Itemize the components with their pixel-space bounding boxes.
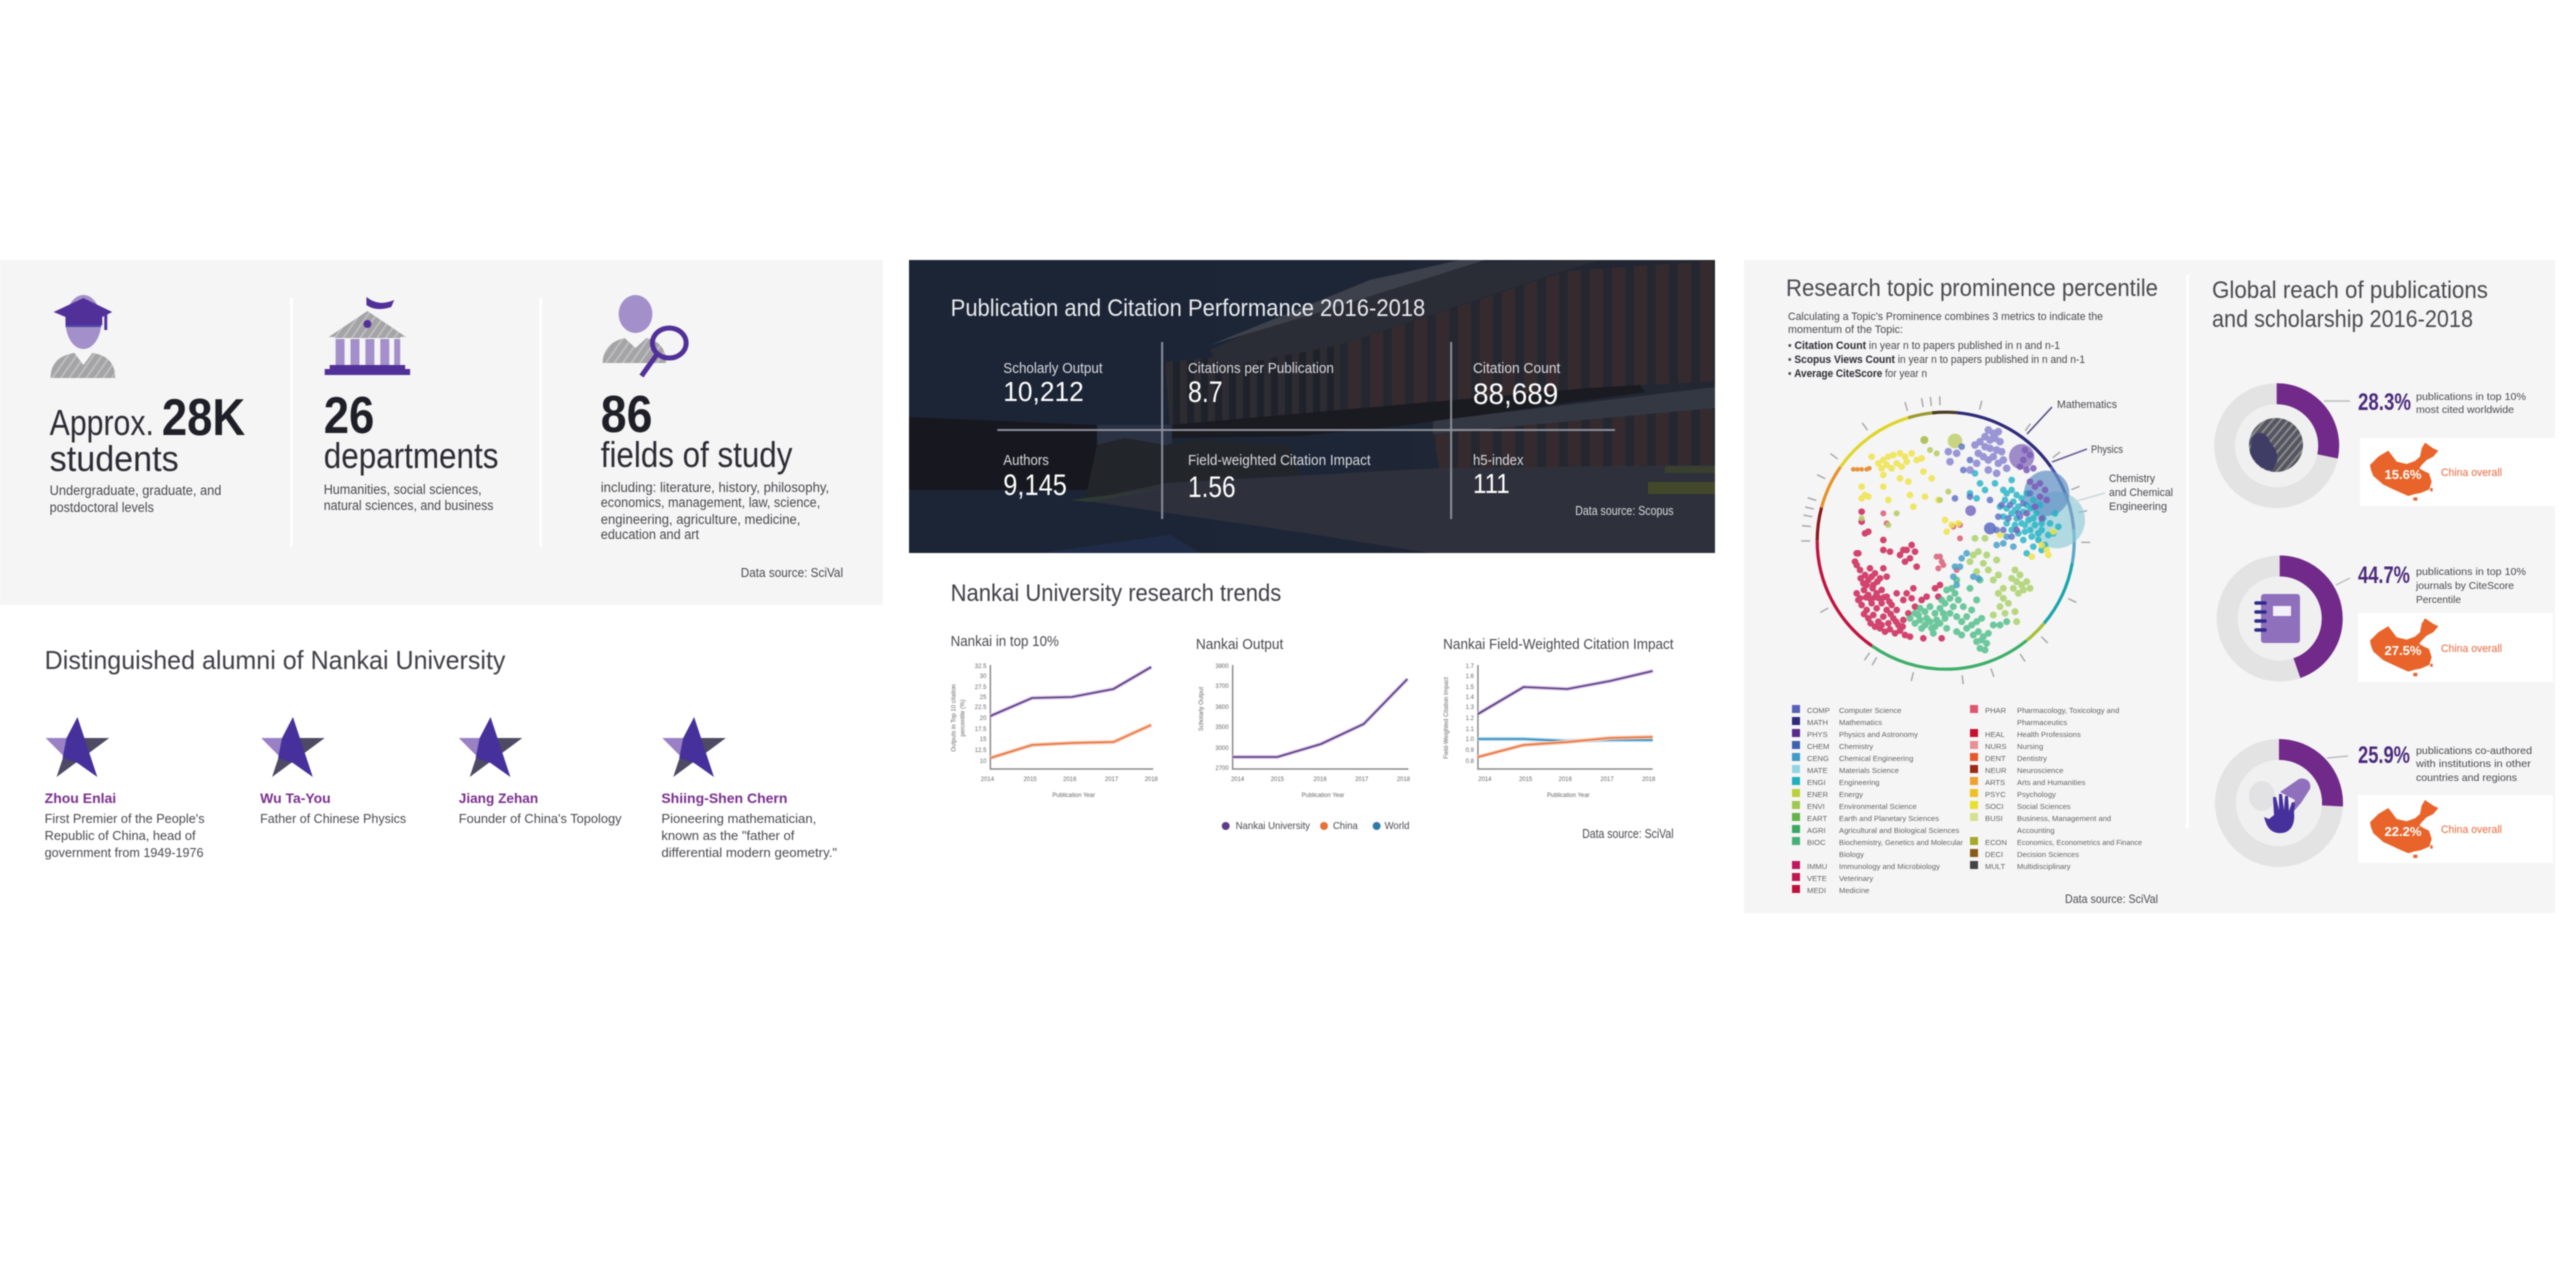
legend: subject areas, right column: Nursing (2017, 742, 2043, 751)
panel: publication and citation performance (909, 260, 1715, 553)
chart legend: Nankai University (1236, 821, 1310, 832)
stat: 25.9% (2358, 742, 2532, 784)
alumnus: Shiing-Shen Chern: Shiing-Shen Chern (661, 790, 787, 806)
line chart: Nankai in top 10%: 10 (980, 759, 987, 765)
icon: notebook (2256, 594, 2300, 643)
data source: Data source: SciVal (2065, 892, 2158, 906)
heading: research trends: Nankai University research trends (951, 580, 1281, 607)
legend: subject areas, right column: MULT (1985, 862, 2005, 871)
metric: h5-index: h5-index (1473, 452, 1524, 469)
heading: global reach (2212, 277, 2488, 333)
legend: subject areas, left column: Chemistry (1839, 742, 1873, 751)
stat: 44.7%: journals by CiteScore (2415, 580, 2514, 592)
data source: Data source: SciVal (741, 565, 843, 580)
chart: topic prominence wheel (1806, 399, 2173, 681)
data source: Data source: SciVal (1582, 826, 1674, 841)
stat: 28.3% (2358, 389, 2526, 416)
legend: subject areas, left column: CHEM (1807, 742, 1829, 751)
chart legend: China (1333, 821, 1358, 832)
callout: China overall 15.6%: China overall (2441, 467, 2502, 479)
metric: citation count (1473, 360, 1561, 411)
data source: Data source: Scopus (1575, 503, 1674, 518)
line chart: Nankai output: Scholarly Output (1199, 687, 1205, 731)
stat: 25.9%: countries and regions (2416, 772, 2517, 784)
legend: subject areas, left column: Medicine (1839, 886, 1869, 895)
line chart: Nankai output: 3500 (1215, 725, 1229, 731)
stat: 44.7% (2358, 562, 2526, 606)
legend: subject areas, right column: Business, Management and (2017, 814, 2111, 823)
heading: global reach: Global reach of publications (2212, 277, 2488, 304)
callout: China overall 15.6% (2360, 438, 2555, 506)
stat: students: Undergraduate, graduate, and (50, 482, 221, 498)
legend: subject areas, right column: Psychology (2017, 790, 2056, 799)
line chart: Nankai in top 10%: 30 (980, 674, 987, 680)
legend: subject areas, left column: MATE (1807, 766, 1828, 775)
line chart: Nankai field-weighted citation impact: 1.7 (1466, 664, 1475, 670)
donut: international collaboration 25.9% (2226, 750, 2348, 856)
line chart: Nankai field-weighted citation impact (1443, 636, 1674, 799)
stat: fields of study: education and art (601, 526, 699, 542)
callout: Physics: Physics (2091, 444, 2123, 456)
legend: subject areas, left column: Veterinary (1839, 874, 1873, 883)
line chart: Nankai field-weighted citation impact: 1.3 (1466, 705, 1475, 711)
metric: scholarly output (1003, 360, 1103, 407)
alumnus: Zhou Enlai (45, 717, 205, 860)
legend: subject areas, right column: NEUR (1985, 766, 2007, 775)
line chart: Nankai output: 2014 (1231, 777, 1245, 783)
legend: subject areas, left column: PHYS (1807, 730, 1828, 739)
legend: subject areas, right column: HEAL (1985, 730, 2005, 739)
stat: 44.7%: Percentile (2416, 594, 2461, 606)
alumnus: Zhou Enlai: Republic of China, head of (45, 828, 196, 843)
line chart: Nankai output: 3600 (1215, 705, 1229, 711)
callout: China overall 22.2%: 22.2% (2384, 824, 2422, 839)
metric: citations per publication: 8.7 (1188, 376, 1223, 409)
heading: publication performance: Publication and Citation Performance 2016-2018 (951, 295, 1425, 322)
line chart: Nankai in top 10%: percentile (%) (961, 700, 967, 736)
legend: subject areas, right column: Economics, Econometrics and Finance (2017, 838, 2142, 847)
line chart: Nankai output: 3700 (1215, 684, 1229, 690)
chart legend (1222, 821, 1409, 832)
legend: subject areas, left column: Engineering (1839, 778, 1880, 787)
prominence description: • Citation Count in year n to papers published in n and n-1 (1788, 340, 2060, 352)
alumnus: Shiing-Shen Chern (661, 717, 838, 860)
line chart: Nankai field-weighted citation impact: 2014 (1478, 777, 1492, 783)
legend: subject areas, left column: MATH (1807, 718, 1828, 727)
legend: subject areas, left column: ENER (1807, 790, 1829, 799)
stat: 44.7%: publications in top 10% (2416, 566, 2526, 578)
icon: graduate student (51, 295, 115, 378)
donut: top journals 44.7% (2227, 566, 2350, 671)
legend: subject areas, right column: Decision Sciences (2017, 850, 2079, 859)
line chart: Nankai field-weighted citation impact: 1.0 (1466, 737, 1475, 743)
legend: subject areas, right column: NURS (1985, 742, 2007, 751)
line chart: Nankai output: 2017 (1355, 777, 1369, 783)
alumnus: Zhou Enlai: government from 1949-1976 (45, 845, 204, 860)
icon: handshake (2249, 779, 2310, 833)
stat: departments: natural sciences, and business (324, 497, 494, 513)
panel: global reach of publications (2212, 277, 2555, 863)
metric: h5-index (1473, 452, 1524, 499)
legend: subject areas, right column: DENT (1985, 754, 2006, 763)
legend: subject areas, left column: Biology (1839, 850, 1864, 859)
icon: globe (2249, 418, 2303, 472)
metric: citations per publication (1188, 360, 1334, 409)
stat: fields of study: including: literature, history, philosophy, (601, 479, 829, 495)
stat: students (50, 388, 245, 515)
line chart: Nankai in top 10%: 27.5 (975, 685, 987, 691)
legend: subject areas, left column: Chemical Engineering (1839, 754, 1913, 763)
legend: subject areas, right column: Social Sciences (2017, 802, 2071, 811)
callout: China overall 27.5% (2358, 613, 2553, 682)
legend: subject areas, right column: Accounting (2017, 826, 2055, 835)
stat: fields of study (601, 385, 829, 542)
legend: subject areas, left column: Energy (1839, 790, 1863, 799)
chart legend: World (1385, 821, 1409, 832)
legend: subject areas, left column: Physics and Astronomy (1839, 730, 1918, 739)
line chart: Nankai in top 10%: 22.5 (975, 705, 987, 711)
line chart: Nankai in top 10%: Publication Year (1052, 793, 1095, 799)
metric: citation count: Citation Count (1473, 360, 1561, 377)
legend: subject areas, right column: ARTS (1985, 778, 2005, 787)
callout: China overall 22.2% (2358, 795, 2553, 863)
legend: subject areas, left column: ENVI (1807, 802, 1825, 811)
callout: China overall 27.5%: China overall (2441, 643, 2502, 655)
panel: university key figures (0, 260, 883, 605)
metric: authors (1003, 452, 1067, 502)
legend: subject areas, left column: MEDI (1807, 886, 1826, 895)
legend: subject areas, right column: Pharmacology, Toxicology and (2017, 706, 2119, 715)
legend: subject areas, left column: CENG (1807, 754, 1829, 763)
legend: subject areas, left column: Materials Science (1839, 766, 1899, 775)
line chart: Nankai in top 10%: 17.5 (975, 727, 987, 733)
line chart: Nankai in top 10%: 32.5 (975, 664, 987, 670)
callout: Physics (2052, 444, 2123, 462)
callout: Mathematics (2027, 399, 2117, 434)
line chart: Nankai in top 10%: Nankai in top 10% (951, 633, 1059, 650)
legend: subject areas, left column: ENGI (1807, 778, 1826, 787)
line chart: Nankai field-weighted citation impact: 1.6 (1466, 674, 1475, 680)
legend: subject areas, right column: DECI (1985, 850, 2003, 859)
callout: China overall 22.2%: China overall (2441, 824, 2502, 836)
heading: global reach: and scholarship 2016-2018 (2212, 306, 2473, 333)
panel: research topic prominence (1786, 275, 2555, 906)
stat: 25.9%: with institutions in other (2415, 758, 2532, 770)
alumnus: Shiing-Shen Chern: Pioneering mathematician, (661, 811, 816, 826)
metric: scholarly output: Scholarly Output (1003, 360, 1103, 377)
alumnus: Shiing-Shen Chern: known as the "father of (661, 828, 795, 843)
legend: subject areas, left column: AGRI (1807, 826, 1826, 835)
legend: subject areas, right column: ECON (1985, 838, 2007, 847)
line chart: Nankai in top 10%: 2015 (1023, 777, 1037, 783)
callout: China overall 27.5%: 27.5% (2384, 643, 2422, 658)
line chart: Nankai field-weighted citation impact: Field-Weighted Citation Impact (1444, 677, 1450, 759)
panel: research trends (951, 580, 1674, 841)
heading: research topic prominence percentile: Research topic prominence percentile (1786, 275, 2158, 302)
stat: 25.9%: publications co-authored (2416, 745, 2532, 757)
stat: fields of study: engineering, agriculture, medicine, (601, 511, 800, 527)
icon: university building (325, 297, 410, 375)
legend: subject areas, left column: BIOC (1807, 838, 1826, 847)
legend: subject areas, left column: IMMU (1807, 862, 1827, 871)
line chart: Nankai output: 2018 (1397, 777, 1411, 783)
alumnus: Wu Ta-You (260, 717, 406, 826)
line chart: Nankai output: Nankai Output (1196, 636, 1284, 653)
line chart: Nankai in top 10%: 2014 (981, 777, 995, 783)
prominence description: momentum of the Topic: (1788, 324, 1903, 336)
legend: subject areas, right column: Neuroscience (2017, 766, 2063, 775)
legend: subject areas, right column: Pharmaceutics (2017, 718, 2067, 727)
stat: fields of study: fields of study (601, 435, 792, 475)
line chart: Nankai in top 10%: 2017 (1105, 777, 1119, 783)
stat: departments (324, 386, 498, 513)
stat: students: postdoctoral levels (50, 499, 154, 515)
line chart: Nankai in top 10%: 15 (980, 737, 987, 743)
alumnus: Wu Ta-You: Wu Ta-You (260, 790, 331, 806)
line chart: Nankai field-weighted citation impact: 1.2 (1466, 716, 1475, 722)
metric: field-weighted citation impact (1188, 452, 1371, 504)
heading: alumni: Distinguished alumni of Nankai University (45, 647, 505, 675)
prominence description: • Average CiteScore for year n (1788, 368, 1927, 380)
stat: 44.7%: 44.7% (2358, 562, 2410, 589)
line chart: Nankai field-weighted citation impact: 1.4 (1466, 695, 1475, 701)
stat: students: 28K (162, 388, 245, 446)
callout: Chemistry and Chemical Engineering: Chemistry (2109, 473, 2155, 485)
line chart: Nankai output: 3000 (1215, 746, 1229, 752)
legend: subject areas, right column: Dentistry (2017, 754, 2047, 763)
line chart: Nankai field-weighted citation impact: 0.9 (1466, 748, 1475, 754)
line chart: Nankai output: Publication Year (1302, 793, 1344, 799)
stat: fields of study: 86 (601, 385, 652, 443)
legend: subject areas, right column: Arts and Humanities (2017, 778, 2086, 787)
alumnus: Jiang Zehan: Jiang Zehan (459, 790, 538, 806)
legend: subject areas, left column: Earth and Planetary Sciences (1839, 814, 1939, 823)
line chart: Nankai in top 10%: 25 (980, 695, 987, 701)
metric: h5-index: 111 (1473, 468, 1510, 499)
callout: Chemistry and Chemical Engineering (2073, 473, 2173, 513)
line chart: Nankai in top 10%: 20 (980, 716, 987, 722)
stat: departments: 26 (324, 386, 374, 444)
line chart: Nankai field-weighted citation impact: Nankai Field-Weighted Citation Impact (1443, 636, 1674, 653)
callout: Chemistry and Chemical Engineering: Engineering (2109, 501, 2167, 513)
line chart: Nankai output: 2016 (1313, 777, 1327, 783)
donut: top cited publications 28.3% (2225, 394, 2350, 498)
stat: fields of study: economics, management, law, science, (601, 494, 820, 510)
line chart: Nankai output: 2015 (1271, 777, 1285, 783)
line chart: Nankai in top 10%: 12.5 (975, 748, 987, 754)
legend: subject areas, right column: SOCI (1985, 802, 2004, 811)
line chart: Nankai field-weighted citation impact: 1.5 (1466, 685, 1475, 691)
legend: subject areas, right column: PSYC (1985, 790, 2006, 799)
metric: scholarly output: 10,212 (1003, 376, 1084, 407)
alumnus: Wu Ta-You: Father of Chinese Physics (260, 811, 406, 826)
prominence description: • Scopus Views Count in year n to papers published in n and n-1 (1788, 354, 2085, 366)
legend: subject areas, right column: Multidisciplinary (2017, 862, 2071, 871)
alumnus: Zhou Enlai: Zhou Enlai (45, 790, 116, 806)
line chart: Nankai output: 2700 (1215, 766, 1229, 772)
legend: subject areas, left column: Environmental Science (1839, 802, 1917, 811)
line chart: Nankai in top 10%: Outputs in Top 10 citation (952, 684, 958, 752)
legend: subject areas, left column: COMP (1807, 706, 1830, 715)
stat: 28.3%: publications in top 10% (2416, 391, 2526, 403)
legend: subject areas, left column (1792, 705, 1963, 895)
panel: distinguished alumni (45, 647, 838, 860)
stat: departments: departments (324, 436, 498, 476)
legend: subject areas, left column: Mathematics (1839, 718, 1882, 727)
legend: subject areas, left column: EART (1807, 814, 1827, 823)
stat: departments: Humanities, social sciences, (324, 481, 482, 497)
line chart: Nankai in top 10%: 2018 (1145, 777, 1159, 783)
stat: 28.3%: 28.3% (2358, 389, 2411, 416)
line chart: Nankai field-weighted citation impact: 2017 (1600, 777, 1614, 783)
stat: 28.3%: most cited worldwide (2416, 404, 2514, 416)
metric: authors: Authors (1003, 452, 1049, 469)
legend: subject areas, left column: VETE (1807, 874, 1827, 883)
icon: researcher with magnifier (603, 295, 686, 376)
legend: subject areas, left column: Computer Science (1839, 706, 1901, 715)
prominence description (1788, 311, 2103, 380)
line chart: Nankai field-weighted citation impact: Publication Year (1547, 793, 1590, 799)
metric: citations per publication: Citations per Publication (1188, 360, 1334, 377)
line chart: Nankai field-weighted citation impact: 0.8 (1466, 759, 1475, 765)
legend: subject areas, right column: Health Professions (2017, 730, 2081, 739)
photo background: campus building at dusk (909, 260, 1715, 553)
metric: field-weighted citation impact: 1.56 (1188, 471, 1236, 504)
legend: subject areas, left column: Agricultural and Biological Sciences (1839, 826, 1960, 835)
legend: subject areas, right column: BUSI (1985, 814, 2003, 823)
callout: Chemistry and Chemical Engineering: and Chemical (2109, 487, 2173, 499)
metric: authors: 9,145 (1003, 469, 1067, 502)
alumnus: Jiang Zehan (459, 717, 622, 826)
stat: 25.9%: 25.9% (2358, 742, 2410, 769)
stat: students: students (50, 439, 179, 479)
line chart: Nankai output: 3800 (1215, 664, 1229, 670)
line chart: Nankai in top 10%: 2016 (1063, 777, 1077, 783)
line chart: Nankai field-weighted citation impact: 2016 (1559, 777, 1573, 783)
legend: subject areas, left column: Immunology and Microbiology (1839, 862, 1940, 871)
stat: students: Approx. (50, 403, 154, 443)
panel: research topics and global reach background (1744, 260, 2555, 913)
prominence description: Calculating a Topic's Prominence combines 3 metrics to indicate the (1788, 311, 2103, 323)
alumnus: Shiing-Shen Chern: differential modern geometry." (661, 845, 838, 860)
line chart: Nankai output (1196, 636, 1411, 799)
legend: subject areas, left column: Biochemistry, Genetics and Molecular (1839, 838, 1963, 847)
line chart: Nankai field-weighted citation impact: 2015 (1519, 777, 1533, 783)
line chart: Nankai field-weighted citation impact: 1.1 (1466, 727, 1475, 733)
line chart: Nankai in top 10% (951, 633, 1159, 799)
legend: subject areas, right column: PHAR (1985, 706, 2007, 715)
line chart: Nankai field-weighted citation impact: 2018 (1642, 777, 1656, 783)
alumnus: Jiang Zehan: Founder of China's Topology (459, 811, 622, 826)
metric: field-weighted citation impact: Field-weighted Citation Impact (1188, 452, 1371, 469)
legend: subject areas, right column (1970, 705, 2142, 871)
metric: citation count: 88,689 (1473, 378, 1558, 411)
alumnus: Zhou Enlai: First Premier of the People's (45, 811, 205, 826)
callout: China overall 15.6%: 15.6% (2384, 467, 2422, 482)
callout: Mathematics: Mathematics (2057, 399, 2117, 411)
